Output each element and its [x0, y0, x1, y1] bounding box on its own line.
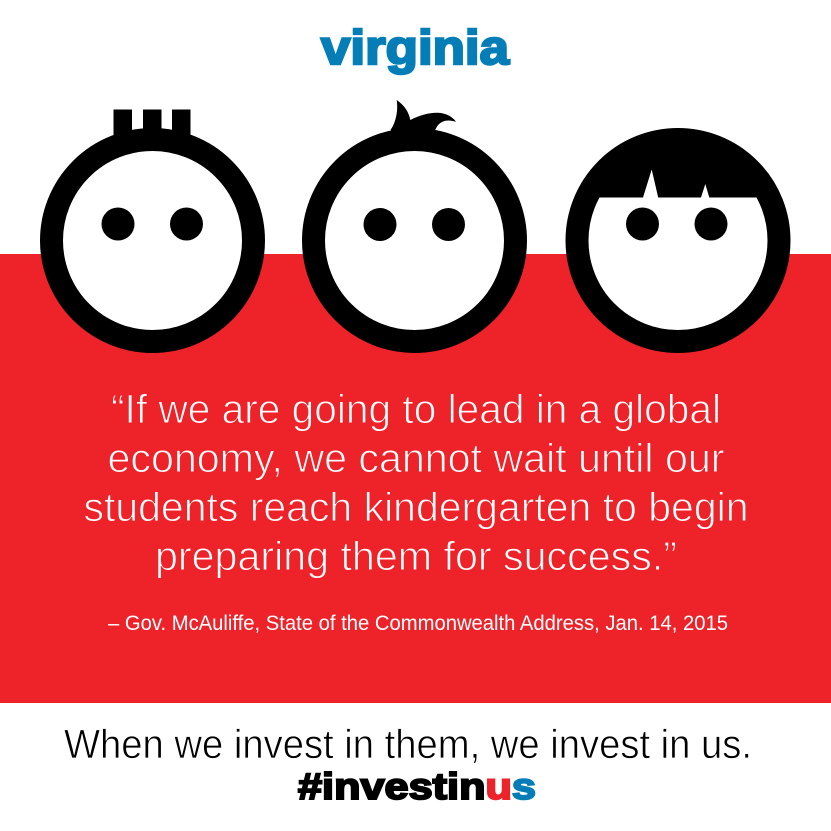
quote text: students reach kindergarten to begin [84, 484, 748, 530]
quote text [84, 386, 748, 579]
title: virginia: virginia [321, 22, 509, 75]
quote text: preparing them for success.” [155, 533, 677, 579]
tagline: When we invest in them, we invest in us. [64, 721, 752, 767]
hashtag: #investinus: #investin us [298, 766, 536, 807]
quote text: economy, we cannot wait until our [108, 435, 724, 481]
quote text: “If we are going to lead in a global [111, 386, 721, 432]
icon: face with fringe hair [577, 140, 779, 342]
quote attribution: – Gov. McAuliffe, State of the Commonwealth Address, Jan. 14, 2015 [108, 612, 728, 635]
red background panel [0, 254, 831, 703]
icon: face with curl hair [314, 100, 516, 342]
icon: face with square hair [52, 110, 254, 342]
